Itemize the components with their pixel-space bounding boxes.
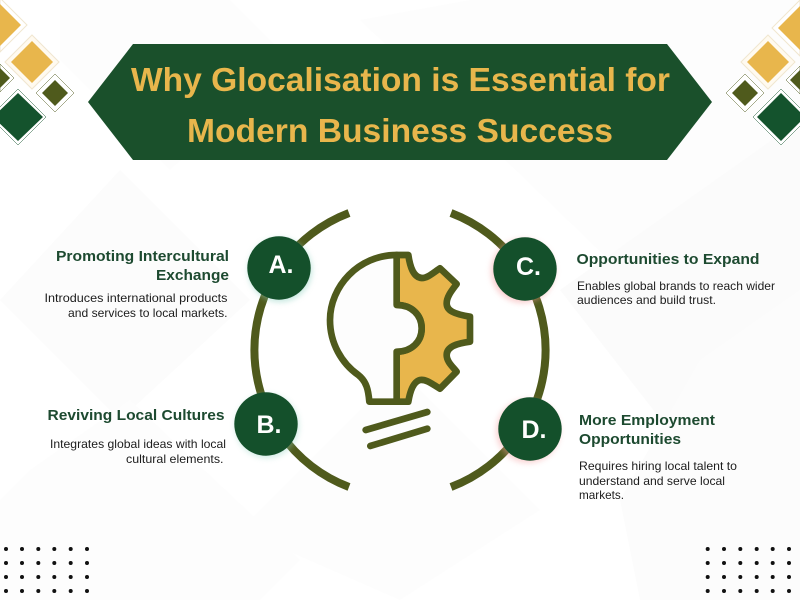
title banner — [88, 44, 712, 160]
text block: Opportunities to Expand: audiences and build trust. — [577, 293, 716, 307]
text block: Reviving Local Cultures: cultural elements. — [126, 452, 224, 466]
text block: More Employment Opportunities: Opportunities — [579, 431, 681, 448]
bulb half — [330, 255, 422, 402]
title: Modern Business Success — [187, 112, 613, 149]
text block: More Employment Opportunities: More Employment — [579, 412, 715, 429]
text block: More Employment Opportunities: understand and serve local — [579, 474, 725, 488]
badge C — [491, 237, 557, 303]
badge A — [247, 236, 312, 302]
text block: Opportunities to Expand — [576, 251, 775, 307]
bulb base lines — [366, 412, 427, 446]
text block: Promoting Intercultural Exchange: Promoting Intercultural — [56, 248, 229, 265]
text block: More Employment Opportunities: Requires hiring local talent to — [579, 459, 737, 473]
icon: lightbulb and gear — [330, 255, 470, 446]
title — [131, 61, 670, 149]
text block: Promoting Intercultural Exchange — [44, 248, 229, 320]
text block: Promoting Intercultural Exchange: Introduces international products — [44, 291, 228, 305]
badge B — [234, 392, 299, 458]
text block: Opportunities to Expand: Enables global brands to reach wider — [577, 279, 775, 293]
text block: Reviving Local Cultures: Reviving Local Cultures — [48, 407, 224, 424]
text block: Promoting Intercultural Exchange: Exchange — [156, 267, 229, 284]
text block: Reviving Local Cultures: Integrates global ideas with local — [50, 437, 226, 451]
text block: More Employment Opportunities — [579, 412, 737, 502]
text block: Opportunities to Expand: Opportunities to Expand — [576, 251, 760, 268]
badge A: A. — [268, 251, 294, 279]
ring: left arc — [254, 213, 349, 487]
text block: More Employment Opportunities: markets. — [579, 488, 624, 502]
decorative diamonds: top left — [0, 0, 74, 145]
decorative diamonds: top right — [726, 0, 800, 145]
text block: Reviving Local Cultures — [48, 407, 226, 466]
text block: Promoting Intercultural Exchange: and services to local markets. — [68, 306, 228, 320]
badge B: B. — [256, 411, 282, 439]
dot grid: bottom right — [706, 547, 791, 593]
title: Why Glocalisation is Essential for — [131, 61, 670, 98]
badge D — [496, 397, 562, 463]
badge C: C. — [516, 253, 541, 281]
dot grid: bottom left — [4, 547, 89, 593]
ring: right arc — [451, 213, 546, 487]
badge D: D. — [522, 416, 546, 444]
gear half — [397, 255, 470, 402]
